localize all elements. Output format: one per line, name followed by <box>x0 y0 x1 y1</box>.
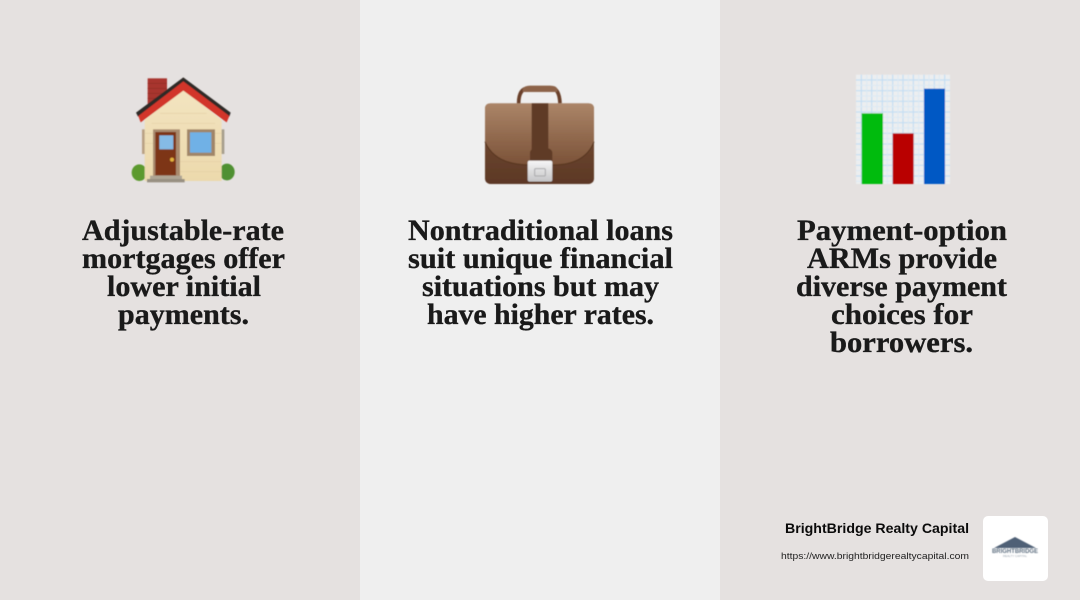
heading: payment-option ARMs: diverse payment <box>796 270 1007 303</box>
heading: adjustable-rate mortgages: payments. <box>118 298 249 331</box>
heading: payment-option ARMs: Payment-option <box>797 214 1007 247</box>
heading: nontraditional loans: situations but may <box>422 270 659 303</box>
heading: nontraditional loans: Nontraditional loans <box>408 214 673 247</box>
heading: nontraditional loans: have higher rates. <box>427 298 654 331</box>
panel: payment-option ARMs <box>720 0 1080 600</box>
logo <box>983 516 1048 581</box>
logo: REALTY CAPITAL <box>1003 554 1027 558</box>
footer: company brand <box>781 516 1048 581</box>
panel: nontraditional loans <box>360 0 720 600</box>
heading: adjustable-rate mortgages: Adjustable-rate <box>82 214 284 247</box>
heading: nontraditional loans: suit unique financial <box>408 242 673 275</box>
heading: payment-option ARMs <box>796 214 1007 359</box>
company name: BrightBridge Realty Capital <box>785 521 969 536</box>
heading: payment-option ARMs: borrowers. <box>830 326 973 359</box>
heading: payment-option ARMs: choices for <box>831 298 973 331</box>
heading: adjustable-rate mortgages: mortgages offer <box>82 242 285 275</box>
icon: house <box>132 77 235 182</box>
panel: adjustable-rate mortgages <box>0 0 360 600</box>
heading: adjustable-rate mortgages <box>82 214 285 331</box>
heading: nontraditional loans <box>408 214 673 331</box>
heading: adjustable-rate mortgages: lower initial <box>107 270 261 303</box>
icon: bar chart <box>856 75 950 184</box>
heading: payment-option ARMs: ARMs provide <box>807 242 997 275</box>
icon: briefcase <box>485 86 594 184</box>
website url: https://www.brightbridgerealtycapital.com <box>781 551 969 562</box>
logo: BRIGHTBRIDGE <box>992 549 1038 555</box>
